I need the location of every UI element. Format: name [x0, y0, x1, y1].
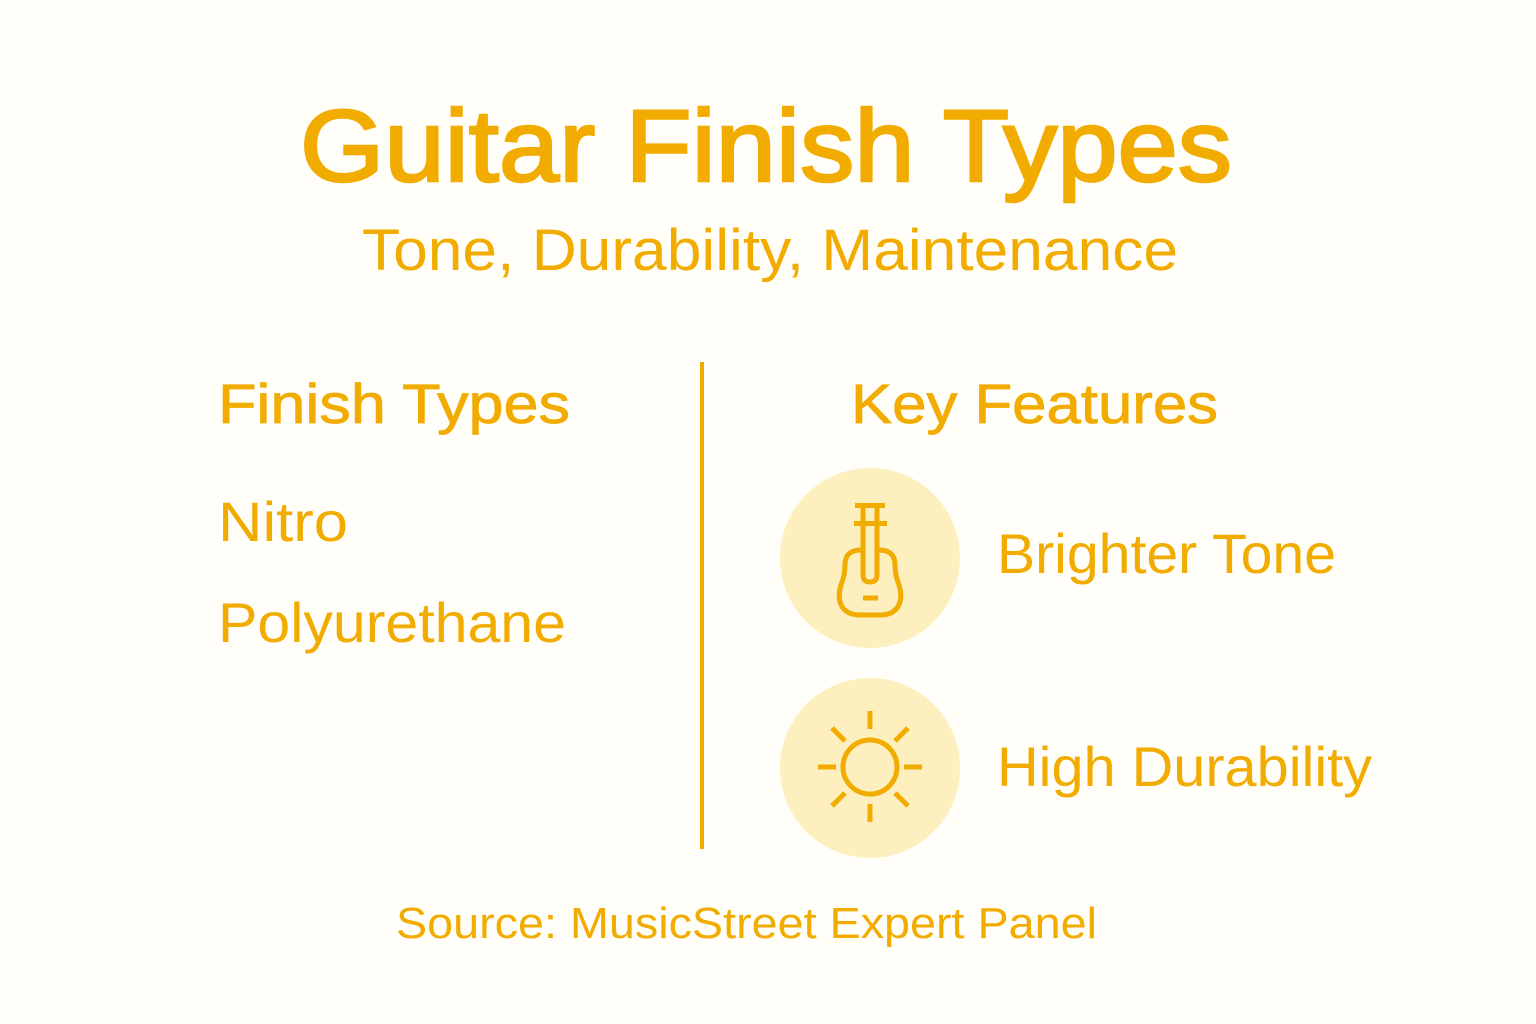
- feature: brighter tone: Brighter Tone: [997, 522, 1336, 585]
- item: nitro: Nitro: [218, 490, 348, 553]
- item: polyurethane: Polyurethane: [218, 591, 566, 654]
- heading: finish types: Finish Types: [218, 372, 570, 435]
- icon: guitar: [780, 468, 960, 648]
- feature: high durability: High Durability: [997, 735, 1372, 798]
- source note: Source: MusicStreet Expert Panel: [396, 899, 1097, 948]
- subtitle: Tone, Durability, Maintenance: [362, 218, 1178, 283]
- title: Guitar Finish Types: [300, 89, 1232, 203]
- heading: key features: Key Features: [851, 372, 1218, 435]
- panel: key features: [780, 372, 1372, 858]
- panel: finish types: [218, 372, 570, 654]
- icon: sun: [780, 678, 960, 858]
